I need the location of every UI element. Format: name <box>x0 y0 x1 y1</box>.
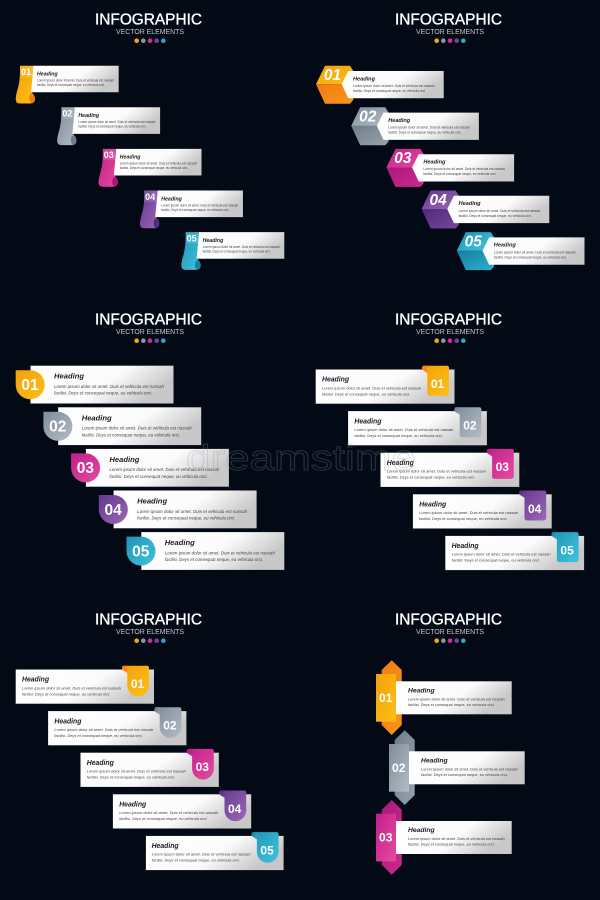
header: panel 1 <box>95 12 202 43</box>
header: panel 3 <box>95 312 202 343</box>
step 02 square tab: Heading <box>354 418 382 425</box>
step 03 teardrop: facilisi. Deys et consequat neque, eu vehicula orci. <box>109 474 208 479</box>
step 03 teardrop: Heading <box>109 455 140 464</box>
step 01 teardrop: facilisi. Deys et consequat neque, eu vehicula orci. <box>54 391 152 396</box>
panel: hexagon blocks <box>316 12 584 270</box>
step 01 hexagon: facilisi. Deys et consequat neque, eu vehicula orci. <box>353 89 426 93</box>
step 04 square tab: Heading <box>419 502 447 508</box>
step 04 hexagon: 04 <box>429 192 447 209</box>
header: panel 4: VECTOR ELEMENTS <box>416 329 484 336</box>
step 02 teardrop: 02 <box>49 419 66 436</box>
step 02 banner: Heading <box>421 757 449 764</box>
step 05 square tab: Lorem ipsum dolor sit amet. Duis et vehicula est nassah <box>452 552 551 557</box>
step 04 teardrop <box>99 490 257 528</box>
step 05 rounded tab: Heading <box>152 843 179 850</box>
step 01 square tab: facilisi. Deys et consequat neque, eu vehicula orci. <box>322 391 410 396</box>
step 01 scroll: facilisi. Deys et consequat neque, eu vehicula orci. <box>37 83 105 87</box>
step 03 rounded tab: Heading <box>87 760 115 767</box>
step 05 scroll <box>181 232 284 270</box>
step 01 banner: 01 <box>379 691 393 705</box>
step 05 teardrop: Lorem ipsum dolor sit amet. Duis et vehicula est nassah <box>165 550 275 555</box>
step 05 rounded tab <box>146 832 284 870</box>
step 04 scroll: facilisi. Deys et consequat neque, eu vehicula orci. <box>161 208 229 212</box>
step 04 scroll: 04 <box>145 192 155 202</box>
step 03 square tab <box>380 449 519 487</box>
step 01 teardrop: Lorem ipsum dolor sit amet. Duis et vehicula est nassah <box>54 384 164 389</box>
step 05 hexagon: facilisi. Deys et consequat neque, eu vehicula orci. <box>494 255 567 259</box>
step 01 banner: Lorem ipsum dolor sit amet. Duis et vehicula est nassah <box>408 696 505 701</box>
step 03 banner: Lorem ipsum dolor sit amet. Duis et vehicula est nassah <box>408 836 505 841</box>
step 01 rounded tab: Heading <box>22 677 50 684</box>
step 02 teardrop <box>43 407 201 445</box>
step 05 scroll: Lorem ipsum dolor sit amet. Duis et vehicula est nassah <box>203 245 280 249</box>
step 04 rounded tab: Lorem ipsum dolor sit amet. Duis et vehicula est nassah <box>119 810 218 815</box>
step 03 banner: facilisi. Deys et consequat neque, eu vehicula orci. <box>408 842 495 847</box>
header: panel 3: INFOGRAPHIC <box>95 312 202 328</box>
step 01 scroll: Heading <box>37 72 58 78</box>
step 05 scroll: Heading <box>203 238 224 244</box>
step 02 banner: 02 <box>392 761 406 775</box>
header: panel 6: INFOGRAPHIC <box>395 612 502 628</box>
step 05 teardrop: 05 <box>132 543 150 560</box>
step 03 square tab: facilisi. Deys et consequat neque, eu vehicula orci. <box>387 474 475 480</box>
step 05 hexagon <box>457 232 584 270</box>
step 05 rounded tab: facilisi. Deys et consequat neque, eu vehicula orci. <box>152 858 240 863</box>
step 03 rounded tab: 03 <box>196 760 209 774</box>
step 04 square tab: 04 <box>528 502 542 516</box>
header: panel 1: INFOGRAPHIC <box>95 12 202 28</box>
step 03 teardrop: Lorem ipsum dolor sit amet. Duis et vehicula est nassah <box>109 467 220 472</box>
step 01 square tab <box>316 366 454 404</box>
step 01 scroll <box>16 66 119 104</box>
step 01 square tab: Heading <box>322 377 350 384</box>
step 05 hexagon: 05 <box>465 233 482 250</box>
step 01 square tab: Lorem ipsum dolor sit amet. Duis et vehicula est nassah <box>322 385 421 390</box>
step 01 rounded tab: facilisi. Deys et consequat neque, eu vehicula orci. <box>22 691 110 696</box>
step 01 square tab: 01 <box>431 377 444 391</box>
step 02 rounded tab <box>48 707 186 745</box>
step 05 teardrop <box>126 532 284 570</box>
step 02 square tab: facilisi. Deys et consequat neque, eu vehicula orci. <box>354 433 443 438</box>
step 04 hexagon <box>422 190 549 228</box>
step 04 teardrop: Lorem ipsum dolor sit amet. Duis et vehicula est nassah <box>137 509 248 514</box>
step 02 scroll: Lorem ipsum dolor sit amet. Duis et vehicula est nassah <box>78 120 155 124</box>
step 04 teardrop: Heading <box>137 496 167 506</box>
step 03 scroll: Heading <box>120 155 141 161</box>
header: panel 5: VECTOR ELEMENTS <box>116 629 184 636</box>
step 05 teardrop: facilisi. Deys et consequat neque, eu vehicula orci. <box>165 557 263 562</box>
panel: scroll ribbons <box>16 12 284 270</box>
step 04 hexagon: Lorem ipsum dolor sit amet. Duis et vehicula est nassah <box>459 209 540 213</box>
step 03 scroll <box>98 149 202 187</box>
step 02 hexagon: 02 <box>359 109 377 126</box>
step 01 rounded tab: 01 <box>131 677 144 691</box>
step 04 scroll <box>140 190 243 228</box>
step 02 hexagon: Heading <box>388 118 411 124</box>
watermark: dreamstime <box>186 437 416 478</box>
step 04 square tab: Lorem ipsum dolor sit amet. Duis et vehicula est nassah <box>419 510 518 515</box>
step 01 hexagon: Heading <box>353 76 375 82</box>
step 03 hexagon: Heading <box>423 160 446 166</box>
header: panel 3: VECTOR ELEMENTS <box>116 329 184 336</box>
step 05 square tab: Heading <box>452 543 479 550</box>
header: panel 4 <box>395 312 502 343</box>
header: panel 1: VECTOR ELEMENTS <box>116 29 184 36</box>
step 05 hexagon: Heading <box>494 243 516 249</box>
step 01 banner <box>376 660 512 735</box>
panel: teardrop badges <box>16 312 284 570</box>
step 04 square tab <box>413 490 552 528</box>
step 03 rounded tab <box>80 749 219 787</box>
panel: rounded tabs <box>16 612 284 870</box>
step 02 scroll: Heading <box>78 113 100 119</box>
step 04 rounded tab <box>113 790 251 828</box>
step 01 hexagon: Lorem ipsum dolor sit amet. Duis et vehicula est nassah <box>353 84 435 88</box>
header: panel 2 <box>395 12 502 43</box>
step 02 scroll: 02 <box>62 109 72 119</box>
step 05 scroll: facilisi. Deys et consequat neque, eu vehicula orci. <box>203 249 271 253</box>
step 03 square tab: Lorem ipsum dolor sit amet. Duis et vehicula est nassah <box>387 468 486 474</box>
step 05 rounded tab: 05 <box>260 843 274 857</box>
step 05 square tab: 05 <box>560 543 574 557</box>
header: panel 5: INFOGRAPHIC <box>95 612 202 628</box>
step 03 hexagon <box>386 149 514 187</box>
step 03 teardrop: 03 <box>77 460 94 477</box>
step 01 hexagon: 01 <box>324 67 341 84</box>
header: panel 6 <box>395 612 502 643</box>
header: panel 5 <box>95 612 202 643</box>
step 02 rounded tab: facilisi. Deys et consequat neque, eu vehicula orci. <box>54 733 143 738</box>
step 03 rounded tab: Lorem ipsum dolor sit amet. Duis et vehicula est nassah <box>87 768 186 774</box>
step 01 hexagon <box>316 66 444 104</box>
step 04 square tab: facilisi. Deys et consequat neque, eu vehicula orci. <box>419 516 508 521</box>
header: panel 6: VECTOR ELEMENTS <box>416 629 484 636</box>
step 01 rounded tab: Lorem ipsum dolor sit amet. Duis et vehicula est nassah <box>22 685 121 690</box>
step 02 square tab: 02 <box>463 419 477 433</box>
step 02 teardrop: facilisi. Deys et consequat neque, eu vehicula orci. <box>82 432 180 437</box>
step 03 square tab: 03 <box>496 460 509 474</box>
step 02 rounded tab: 02 <box>163 719 177 733</box>
step 03 square tab: Heading <box>387 460 415 467</box>
step 05 scroll: 05 <box>187 233 197 243</box>
step 04 hexagon: facilisi. Deys et consequat neque, eu vehicula orci. <box>459 214 532 218</box>
step 04 rounded tab: facilisi. Deys et consequat neque, eu vehicula orci. <box>119 816 208 821</box>
step 04 scroll: Lorem ipsum dolor sit amet. Duis et vehicula est nassah <box>161 203 238 207</box>
step 03 scroll: Lorem ipsum dolor sit amet. Duis et vehicula est nassah <box>120 162 197 166</box>
step 02 rounded tab: Lorem ipsum dolor sit amet. Duis et vehicula est nassah <box>54 727 153 732</box>
step 02 hexagon: facilisi. Deys et consequat neque, eu vehicula orci. <box>388 131 461 135</box>
step 01 banner: facilisi. Deys et consequat neque, eu vehicula orci. <box>408 702 495 707</box>
step 05 square tab: facilisi. Deys et consequat neque, eu vehicula orci. <box>452 558 540 563</box>
step 02 scroll: facilisi. Deys et consequat neque, eu vehicula orci. <box>78 125 146 129</box>
step 02 scroll <box>57 107 160 145</box>
step 03 scroll: 03 <box>104 150 114 160</box>
step 03 hexagon: 03 <box>394 150 412 167</box>
step 01 teardrop <box>16 366 174 404</box>
step 04 teardrop: facilisi. Deys et consequat neque, eu vehicula orci. <box>137 516 235 520</box>
header: panel 4: INFOGRAPHIC <box>395 312 502 328</box>
header: panel 2: INFOGRAPHIC <box>395 12 502 28</box>
step 02 teardrop: Lorem ipsum dolor sit amet. Duis et vehicula est nassah <box>82 426 192 431</box>
step 02 hexagon: Lorem ipsum dolor sit amet. Duis et vehicula est nassah <box>388 126 470 130</box>
panel: vertical banners <box>376 612 525 875</box>
step 02 square tab: Lorem ipsum dolor sit amet. Duis et vehicula est nassah <box>354 427 453 432</box>
step 04 rounded tab: 04 <box>228 802 242 816</box>
step 04 scroll: Heading <box>161 196 182 202</box>
step 01 scroll: 01 <box>21 67 31 77</box>
step 01 rounded tab <box>16 666 154 704</box>
step 01 scroll: Lorem ipsum dolor sit amet. Duis et vehicula est nassah <box>37 78 114 82</box>
step 02 banner: facilisi. Deys et consequat neque, eu vehicula orci. <box>421 772 508 777</box>
step 04 rounded tab: Heading <box>119 802 147 808</box>
step 03 rounded tab: facilisi. Deys et consequat neque, eu vehicula orci. <box>87 774 175 780</box>
step 01 banner: Heading <box>408 687 436 694</box>
header: panel 2: VECTOR ELEMENTS <box>416 29 484 36</box>
step 05 square tab <box>445 532 584 570</box>
step 03 hexagon: Lorem ipsum dolor sit amet. Duis et vehicula est nassah <box>423 167 505 171</box>
step 03 banner: Heading <box>408 827 436 834</box>
panel: square tabs <box>316 312 584 570</box>
step 03 banner: 03 <box>379 831 393 845</box>
step 01 teardrop: 01 <box>21 377 39 394</box>
step 05 hexagon: Lorem ipsum dolor sit amet. Duis et vehicula est nassah <box>494 250 576 254</box>
step 02 rounded tab: Heading <box>54 718 82 725</box>
step 04 teardrop: 04 <box>104 502 122 519</box>
step 03 hexagon: facilisi. Deys et consequat neque, eu vehicula orci. <box>423 172 496 176</box>
step 04 hexagon: Heading <box>459 201 481 207</box>
step 03 scroll: facilisi. Deys et consequat neque, eu vehicula orci. <box>120 166 188 170</box>
step 05 teardrop: Heading <box>165 538 195 547</box>
step 02 square tab <box>348 407 487 445</box>
step 02 teardrop: Heading <box>82 413 112 422</box>
step 01 teardrop: Heading <box>54 372 84 381</box>
step 03 teardrop <box>71 449 229 487</box>
step 02 banner: Lorem ipsum dolor sit amet. Duis et vehicula est nassah <box>421 766 518 771</box>
step 05 rounded tab: Lorem ipsum dolor sit amet. Duis et vehicula est nassah <box>152 852 251 857</box>
step 02 hexagon <box>351 107 479 145</box>
step 02 banner <box>389 730 525 805</box>
step 03 banner <box>376 800 512 875</box>
